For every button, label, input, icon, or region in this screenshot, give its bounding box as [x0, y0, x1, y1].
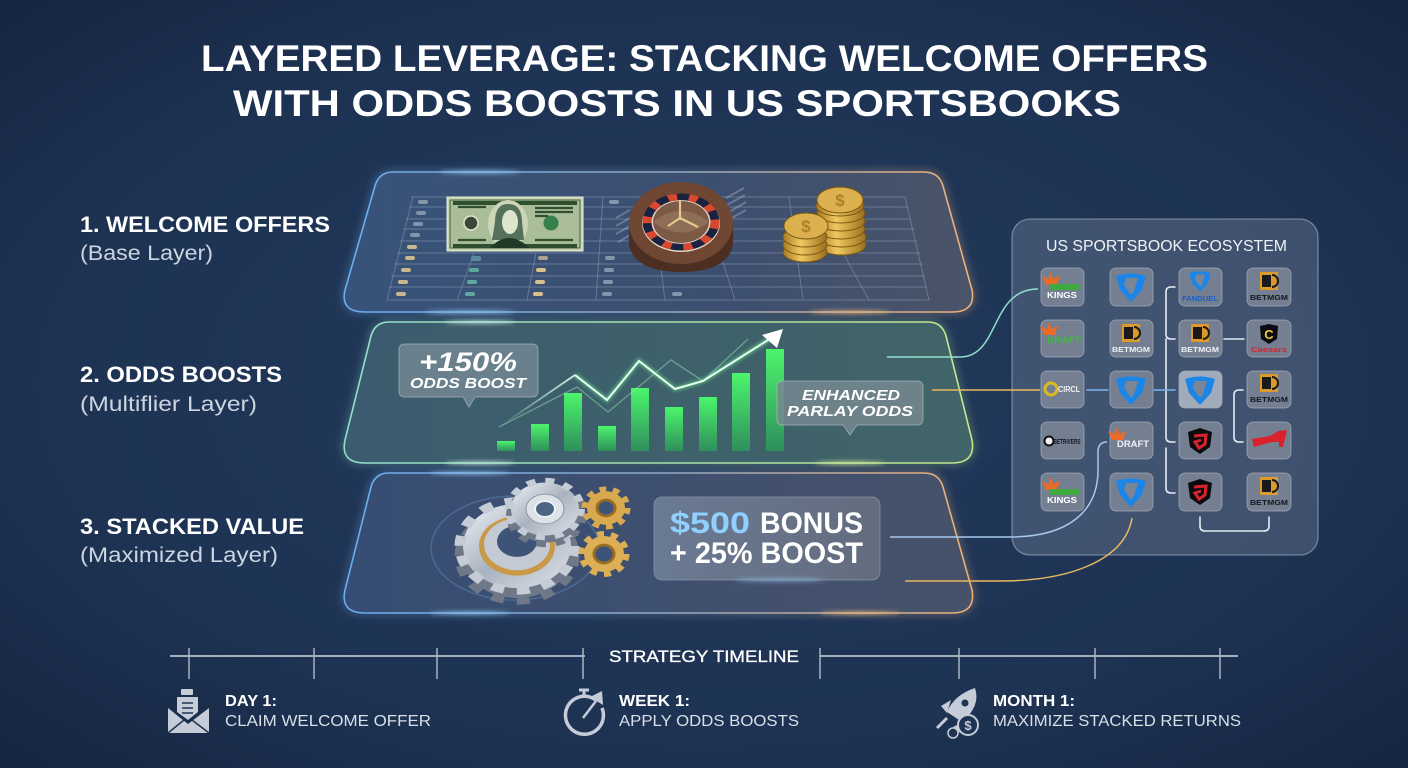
- layer label 1: 1. WELCOME OFFERS: [80, 212, 330, 237]
- tile logos row 5: [1042, 477, 1288, 507]
- layer label 3: [80, 514, 304, 567]
- layer label 2: 2. ODDS BOOSTS: [80, 362, 282, 387]
- bonus box: + 25% BOOST: [670, 537, 863, 570]
- ecosystem connectors: [1087, 287, 1269, 531]
- callout: enhanced parlay odds: PARLAY ODDS: [787, 404, 913, 420]
- panel: odds boosts: [344, 321, 973, 464]
- icon: gears: [431, 481, 627, 600]
- tile logos row 2: BETMGM: [1112, 345, 1150, 354]
- bar chart: [497, 349, 784, 451]
- icon: coin stacks: $: [801, 217, 811, 236]
- milestone: month 1: [937, 688, 1241, 738]
- connector: odds boosts to ecosystem: [887, 289, 1038, 357]
- panel: us sportsbook ecosystem: [1012, 219, 1318, 555]
- connector: bonus box to ecosystem: [890, 442, 1107, 537]
- panel: stacked value: [344, 472, 973, 614]
- title: [201, 38, 1208, 124]
- layer label 2: (Multiflier Layer): [80, 393, 257, 416]
- gold gear top: [585, 490, 627, 526]
- small silver gear: [509, 481, 582, 544]
- tile logos row 1: FANDUEL: [1182, 294, 1218, 303]
- layer label 1: (Base Layer): [80, 242, 213, 265]
- milestone: week 1: WEEK 1:: [619, 693, 690, 710]
- bonus box: [654, 497, 880, 581]
- milestone: week 1: APPLY ODDS BOOSTS: [619, 713, 799, 730]
- callout: +150% odds boost: ODDS BOOST: [410, 375, 528, 392]
- tile logos row 1: [1042, 271, 1288, 303]
- title: WITH ODDS BOOSTS IN US SPORTSBOOKS: [233, 83, 1121, 124]
- icon: dollar bill: [447, 197, 583, 251]
- bonus box: BONUS: [760, 507, 863, 540]
- layer label 1: [80, 212, 330, 265]
- bonus box: $500: [670, 507, 750, 540]
- tile grid: [1040, 268, 1291, 511]
- icon: rocket with coins: $: [964, 718, 972, 733]
- icon: envelope: [168, 689, 209, 733]
- milestone: day 1: CLAIM WELCOME OFFER: [225, 713, 431, 730]
- callout: +150% odds boost: [399, 344, 538, 407]
- tile logos row 2: C: [1264, 327, 1274, 342]
- milestone: month 1: MONTH 1:: [993, 693, 1075, 710]
- callout: +150% odds boost: +150%: [419, 347, 517, 377]
- tile logos row 2: Caesars: [1251, 345, 1287, 354]
- icon: coin stacks: [783, 187, 866, 262]
- tile logos row 4: [1044, 427, 1287, 454]
- tile logos row 2: DRAFT: [1047, 335, 1082, 345]
- large silver gear: [460, 502, 574, 600]
- strategy timeline: [170, 647, 1238, 679]
- ecosystem heading: US SPORTSBOOK ECOSYSTEM: [1046, 238, 1287, 255]
- tile logos row 3: [1045, 374, 1288, 405]
- icon: coin stacks: $: [835, 191, 845, 210]
- tile logos row 4: DRAFT: [1117, 439, 1150, 449]
- trend arrows: [499, 329, 783, 427]
- title: LAYERED LEVERAGE: STACKING WELCOME OFFERS: [201, 38, 1208, 79]
- connector: parlay odds to ecosystem: [932, 389, 1040, 391]
- tile logos row 1: KINGS: [1047, 291, 1078, 300]
- callout: enhanced parlay odds: ENHANCED: [802, 388, 901, 404]
- tile logos row 3: BETMGM: [1250, 395, 1288, 404]
- tile logos row 2: BETMGM: [1181, 345, 1219, 354]
- layer label 3: 3. STACKED VALUE: [80, 514, 304, 539]
- milestone: month 1: MAXIMIZE STACKED RETURNS: [993, 713, 1241, 730]
- tile logos row 1: BETMGM: [1250, 293, 1288, 302]
- milestone: day 1: [168, 689, 431, 733]
- icon: stopwatch: [565, 690, 603, 734]
- layer label 2: [80, 362, 282, 416]
- tile logos row 5: BETMGM: [1250, 498, 1288, 507]
- milestone: day 1: DAY 1:: [225, 693, 277, 710]
- gold gear bottom: [582, 534, 626, 574]
- layer label 3: (Maximized Layer): [80, 544, 278, 567]
- tile logos row 5: KINGS: [1047, 496, 1078, 505]
- icon: rocket with coins: [937, 688, 978, 738]
- milestone: week 1: [565, 690, 799, 734]
- connector: boost to ecosystem: [905, 518, 1132, 581]
- table value pills: [396, 200, 682, 296]
- panel: welcome offers: [344, 171, 973, 313]
- tile logos row 4: BETRIVERS: [1054, 439, 1081, 446]
- tile logos row 3: CIRCL: [1058, 385, 1080, 394]
- odds table grid: [387, 197, 929, 300]
- tile logos row 2: [1040, 322, 1287, 354]
- timeline heading: STRATEGY TIMELINE: [609, 647, 799, 666]
- callout: enhanced parlay odds: [777, 381, 923, 435]
- icon: roulette wheel: [616, 182, 746, 272]
